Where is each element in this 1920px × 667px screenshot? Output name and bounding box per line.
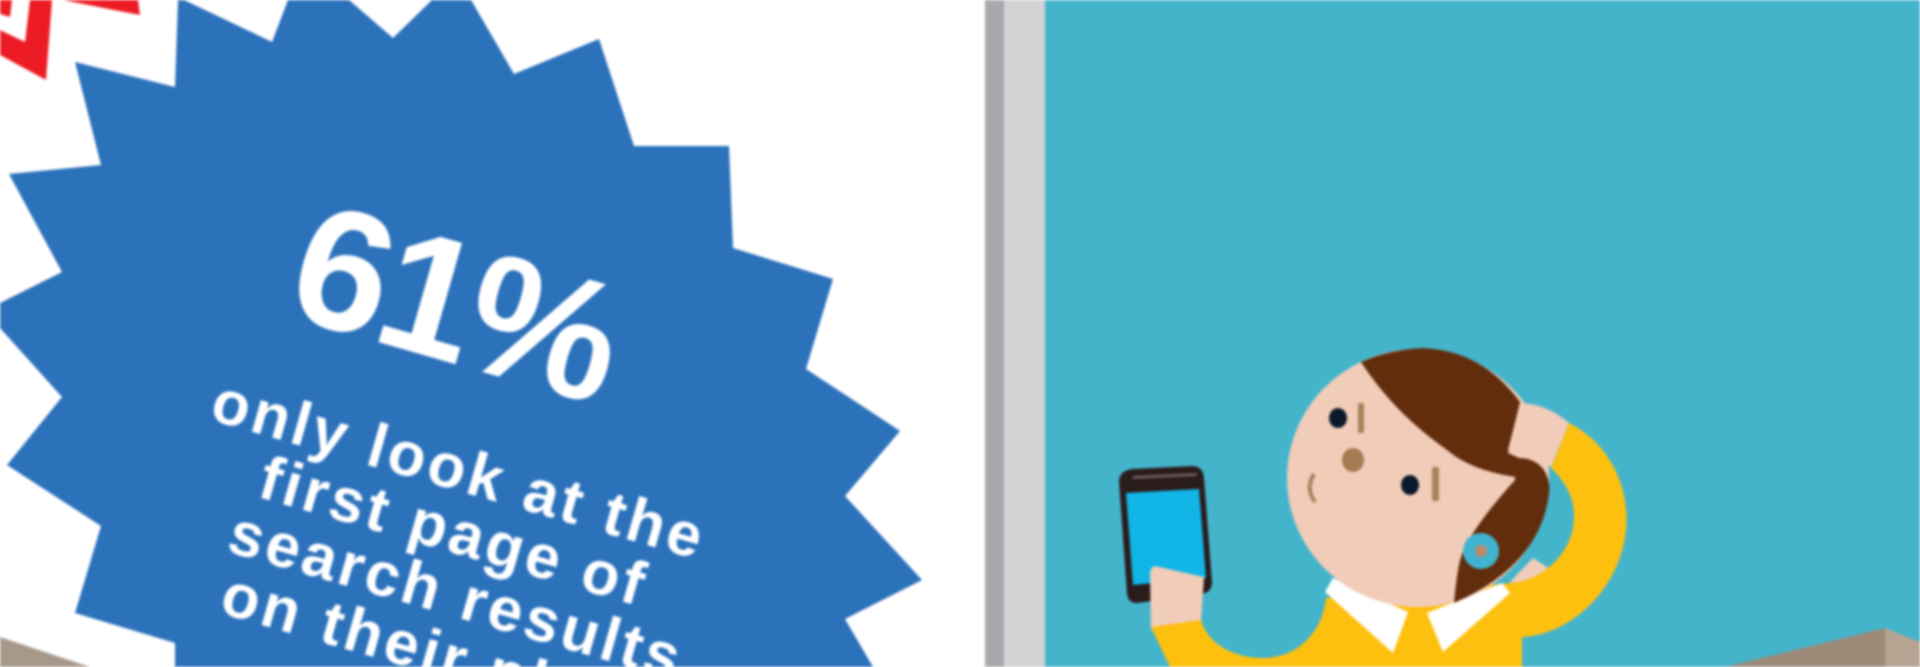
hand holding phone xyxy=(1150,566,1204,630)
grey wall divider xyxy=(985,0,1045,667)
eyebrows xyxy=(1358,403,1439,501)
starburst badge with statistic xyxy=(0,0,922,667)
face xyxy=(1287,349,1549,607)
white collar xyxy=(1325,578,1510,653)
big number: 61%: 61% xyxy=(272,165,640,441)
caption: only look at the first page of search results on their phones: only look at the xyxy=(204,366,714,573)
hand over hair xyxy=(1508,403,1569,467)
earring xyxy=(1463,533,1499,569)
beige box corner, bottom left xyxy=(0,637,90,667)
nose xyxy=(1342,448,1364,472)
beige box, bottom right xyxy=(1725,628,1920,667)
statistic text xyxy=(154,154,842,667)
hair xyxy=(1361,348,1549,603)
yellow sweater with raised arms xyxy=(1151,423,1627,667)
mouth xyxy=(1310,474,1315,502)
icon: red zigzag outline fragment xyxy=(0,0,140,80)
caption: only look at the first page of search results on their phones: first page of xyxy=(252,443,656,620)
phone xyxy=(1119,466,1212,603)
panel: white left background xyxy=(0,0,985,667)
skin behind arm at neck xyxy=(1510,558,1550,590)
blue starburst shape xyxy=(0,0,922,667)
caption: only look at the first page of search results on their phones xyxy=(154,366,781,667)
eyes xyxy=(1329,408,1419,495)
figure: woman looking at her phone, scratching her head xyxy=(1119,348,1627,667)
panel: teal background xyxy=(1045,0,1920,667)
